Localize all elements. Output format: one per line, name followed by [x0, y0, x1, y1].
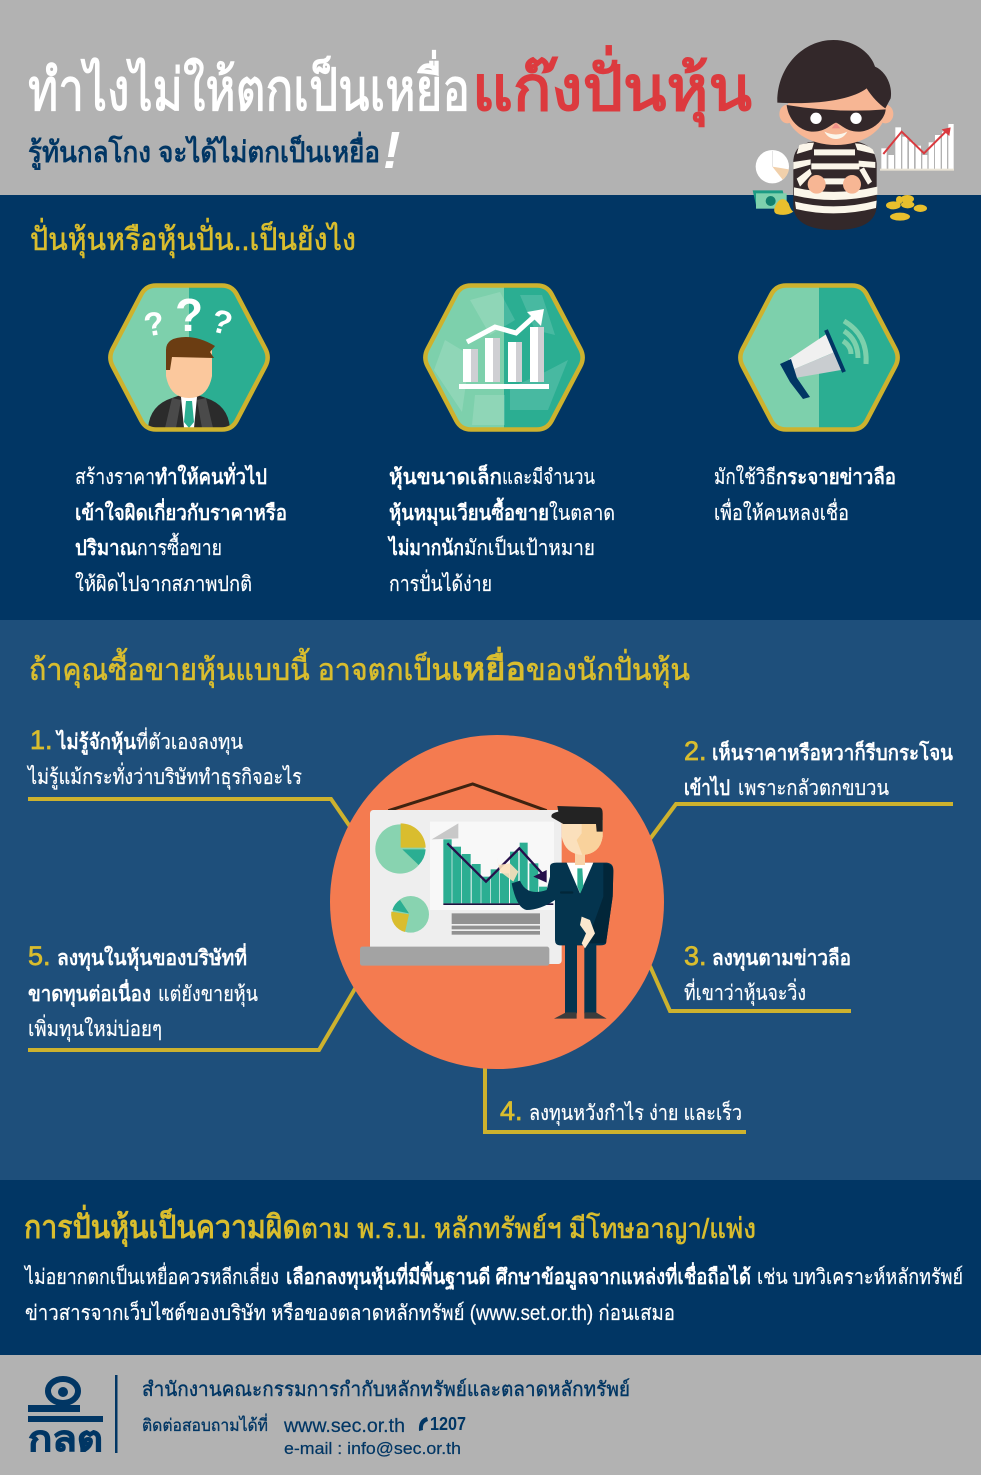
title: ทำไงไม่ให้ตกเป็นเหยื่อ [28, 50, 470, 123]
subtitle: รู้ทันกลโกง จะได้ไม่ตกเป็นเหยื่อ [28, 131, 380, 170]
heading: legal notice: การปั่นหุ้นเป็นความผิด [24, 1204, 301, 1248]
subtitle [28, 122, 400, 180]
item 1: ที่ตัวเองลงทุน [136, 727, 243, 755]
text: contact: www.sec.or.th [283, 1416, 405, 1437]
hands [808, 175, 826, 194]
text: contact [142, 1413, 466, 1458]
text: column 1: การซื้อขาย [137, 533, 222, 560]
item 1: ไม่รู้แม้กระทั่งว่าบริษัททำธุรกิจอะไร [26, 762, 302, 790]
text: column 1: ทำให้คนทั่วไป [155, 461, 267, 489]
item 3: ลงทุนตามข่าวลือ [712, 946, 851, 972]
text: organisation name: สำนักงานคณะกรรมการกำกับหลักทรัพย์และตลาดหลักทรัพย์ [142, 1378, 630, 1401]
footer band [0, 1355, 981, 1475]
divider [115, 1375, 118, 1453]
panel: legal notice [0, 1180, 981, 1355]
logo: SEC: กลต [28, 1418, 103, 1459]
text: column 2: ในตลาด [549, 501, 615, 525]
heading: victim behaviours: ของนักปั่นหุ้น [526, 649, 690, 689]
panel: victim behaviours [0, 620, 981, 1180]
heading: what is stock manipulation: ปั่นหุ้นหรือหุ้นปั่น..เป็นยังไง [30, 218, 356, 259]
text: column 3: เพื่อให้คนหลงเชื่อ [714, 498, 849, 525]
text: legal notice body [23, 1261, 963, 1325]
man [148, 392, 230, 428]
text: column 2: มักเป็นเป้าหมาย [464, 534, 595, 560]
item 4: 4. [500, 1096, 523, 1126]
coin [774, 199, 793, 215]
item 5 [28, 941, 258, 1042]
mask [787, 105, 886, 132]
icon: phone [419, 1417, 428, 1431]
text: column 2: การปั่นได้ง่าย [389, 569, 492, 596]
text: column 1: สร้างราคา [75, 466, 155, 489]
pie charts [375, 824, 425, 874]
text: legal notice body: ข่าวสารจากเว็บไซต์ของบริษัท หรือของตลาดหลักทรัพย์ (www.set.or.th) ก่อนเสมอ [25, 1299, 675, 1325]
face [779, 105, 795, 123]
text: column 3: กระจายข่าวลือ [776, 465, 896, 489]
item 1: ไม่รู้จักหุ้น [55, 729, 137, 756]
text: column 1: เข้าใจผิดเกี่ยวกับราคาหรือ [75, 497, 287, 525]
text: column 2: ไม่มากนัก [387, 535, 464, 560]
item 3: ที่เขาว่าหุ้นจะวิ่ง [684, 978, 806, 1006]
heading: legal notice [24, 1204, 756, 1248]
cash [753, 190, 786, 205]
hair [777, 40, 891, 108]
item 4: ลงทุนหวังกำไร ง่าย และเร็ว [529, 1099, 742, 1126]
text: column 3 [714, 465, 896, 525]
text: column 1: ให้ผิดไปจากสภาพปกติ [75, 572, 252, 596]
icon: confused investor hexagon: ? [141, 304, 167, 344]
item 3: 3. [684, 941, 707, 971]
heading: victim behaviours: เหยื่อ [451, 646, 526, 687]
icon: thief mascot [753, 40, 954, 230]
text: contact: 1207 [430, 1414, 466, 1434]
item 5: แต่ยังขายหุ้น [158, 983, 258, 1007]
text: column 2 [387, 463, 615, 596]
header band [0, 0, 981, 195]
item 5: 5. [28, 941, 51, 971]
heading: victim behaviours [29, 646, 690, 689]
heading: legal notice: ตาม พ.ร.บ. หลักทรัพย์ฯ มีโทษอาญา/แพ่ง [301, 1212, 756, 1244]
text: column 2: และมีจำนวน [502, 466, 595, 489]
item 2 [684, 736, 954, 800]
text: column 3: มักใช้วิธี [714, 465, 776, 489]
bar chart [443, 839, 547, 903]
heading: victim behaviours: ถ้าคุณซื้อขายหุ้นแบบนี้ อาจตกเป็น [29, 648, 451, 689]
text: legal notice body: ไม่อยากตกเป็นเหยื่อควรหลีกเลี่ยง [23, 1262, 279, 1289]
illustration: presenter with board [330, 735, 664, 1069]
item 4 [500, 1096, 742, 1126]
item 2: เห็นราคาหรือหวาก็รีบกระโจน [712, 739, 954, 765]
caption bars [452, 913, 540, 924]
text: legal notice body: เลือกลงทุนหุ้นที่มีพื้นฐานดี ศึกษาข้อมูลจากแหล่งที่เชื่อถือได้ [286, 1261, 751, 1291]
text: column 1 [75, 461, 287, 596]
item 2: เข้าไป [684, 775, 730, 800]
item 5: ลงทุนในหุ้นของบริษัทที่ [57, 942, 247, 972]
item 2: 2. [684, 736, 707, 766]
title: แก๊งปั่นหุ้น [472, 45, 752, 127]
item 2: เพราะกลัวตกขบวน [738, 777, 889, 800]
item 5: ขาดทุนต่อเนื่อง [28, 978, 151, 1008]
text: contact: e-mail : info@sec.or.th [284, 1439, 461, 1458]
body [793, 142, 877, 230]
item 1: 1. [30, 725, 53, 755]
pie [756, 150, 789, 183]
item 3 [684, 941, 851, 1006]
item 1 [26, 725, 302, 790]
item 5: เพิ่มทุนใหม่บ่อยๆ [28, 1014, 162, 1042]
man [565, 940, 577, 1013]
stripes [793, 143, 877, 213]
text: column 1: ปริมาณ [75, 537, 137, 560]
text: contact: ติดต่อสอบถามได้ที่ [142, 1413, 268, 1435]
title [28, 45, 752, 127]
question marks: ? [175, 289, 203, 341]
chart [881, 124, 954, 169]
logo: SEC [28, 1379, 103, 1459]
icon: megaphone hexagon [740, 286, 898, 430]
icon: confused investor hexagon: ? [207, 301, 237, 342]
subtitle: ! [383, 122, 400, 180]
text: column 2: หุ้นขนาดเล็ก [389, 463, 502, 491]
text: column 2: หุ้นหมุนเวียนซื้อขาย [389, 497, 549, 527]
panel: what is stock manipulation [0, 195, 981, 620]
connector lines [28, 799, 953, 1132]
icon: small-cap chart hexagon [425, 286, 583, 430]
coins [886, 195, 927, 221]
icon: confused investor hexagon [110, 286, 268, 430]
